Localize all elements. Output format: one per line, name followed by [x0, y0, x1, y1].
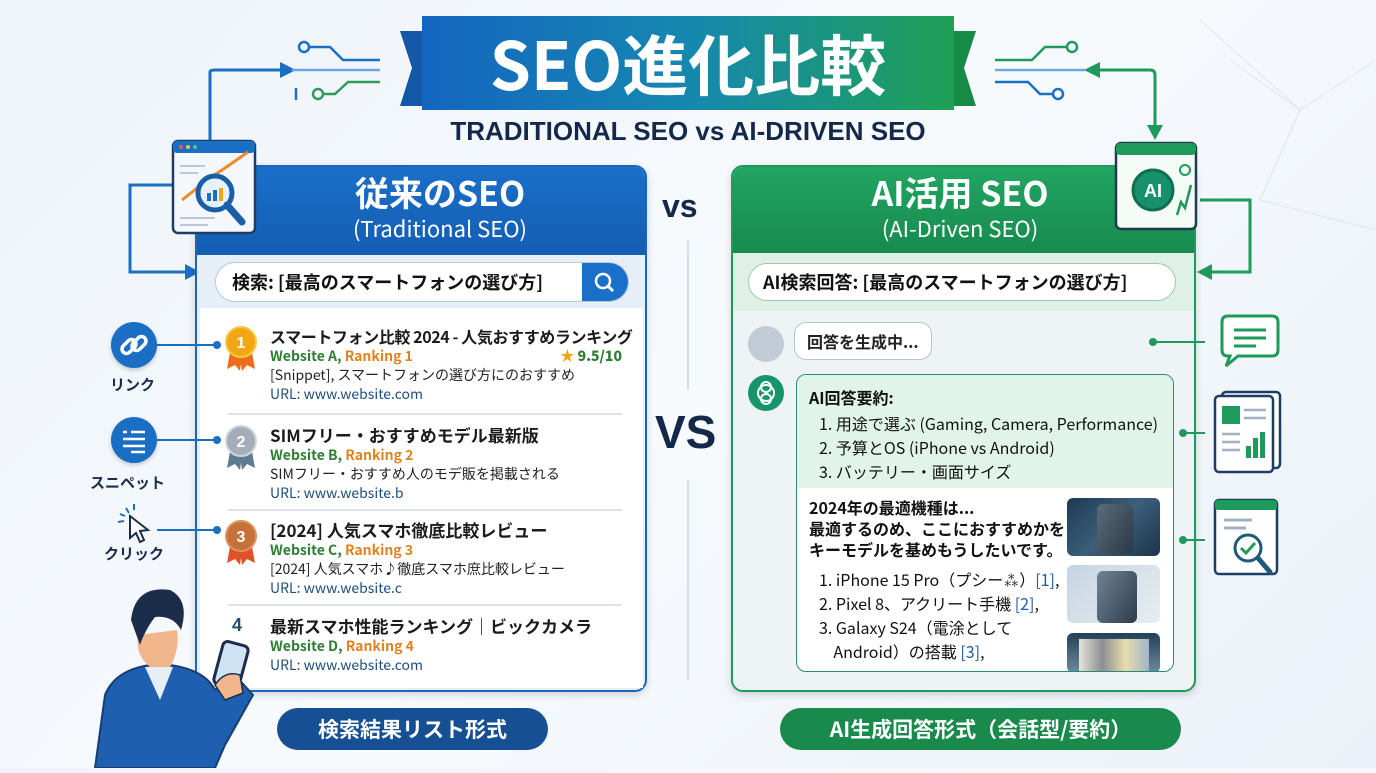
AI answer box: Android）の搭載 [3], [833, 639, 985, 663]
result 1: スマートフォン比較 2024 - 人気おすすめランキング [270, 324, 632, 348]
icon: chat bubble [1220, 314, 1280, 368]
AI answer box: 3. Galaxy S24（電涂として [819, 615, 1012, 639]
AI answer box: AI回答要約: [809, 385, 894, 409]
AI answer box: 1. 用途で選ぶ (Gaming, Camera, Performance) [819, 411, 1158, 435]
icon: document check [1214, 498, 1278, 576]
search bar right [733, 253, 1194, 311]
label: リンク: リンク [110, 374, 155, 395]
result 2: 2 [237, 434, 246, 451]
result 4: 4 [232, 615, 242, 635]
icon: browser magnifier [172, 140, 256, 234]
result 4: Website D, Ranking 4 [270, 636, 414, 656]
icon: document chart [1214, 390, 1282, 474]
label: スニペット: スニペット [90, 472, 165, 493]
chat: generating: 回答を生成中... [807, 329, 919, 353]
result 3: Website C, Ranking 3 [270, 540, 413, 560]
heading: AI活用 SEO [871, 167, 1049, 244]
result 2: SIMフリー・おすすめモデル最新版 [270, 422, 539, 447]
result 1: URL: www.website.com [270, 384, 423, 404]
result 3: [2024] 人気スマホ♪徹底スマホ庶比較レビュー [270, 559, 565, 579]
label pill: AI生成回答形式: AI生成回答形式（会話型/要約） [830, 714, 1131, 744]
result 3 [225, 517, 565, 598]
AI answer box: 2. Pixel 8、アクリート手機 [2], [819, 591, 1039, 615]
label pill: 検索結果リスト形式: 検索結果リスト形式 [318, 714, 507, 744]
phone images [1067, 498, 1160, 556]
heading: AI活用 SEO: AI活用 SEO [871, 167, 1049, 216]
result 1: ★ 9.5/10 [560, 346, 622, 366]
result 4 [232, 613, 592, 675]
result 1: Website A, Ranking 1 [270, 346, 413, 366]
result 2 [225, 422, 560, 503]
result 4: URL: www.website.com [270, 655, 423, 675]
result 2: Website B, Ranking 2 [270, 445, 413, 465]
result 1 [225, 324, 632, 404]
icon: AI browser: AI [1144, 181, 1162, 201]
AI answer box: 最適するのめ、ここにおすすめかを [809, 516, 1065, 540]
icon: click cursor [118, 504, 150, 544]
search bar left [215, 262, 629, 302]
icon: person with phone [94, 589, 254, 768]
heading: 従来のSEO: (Traditional SEO) [353, 212, 527, 244]
AI answer box: 3. バッテリー・画面サイズ [819, 459, 1011, 483]
label pill: AI生成回答形式 [780, 708, 1181, 750]
AI answer box: キーモデルを基めもうしたいです。 [809, 537, 1062, 561]
result 3: 3 [237, 529, 246, 546]
search bar left: 検索: [最高のスマートフォンの選び方] [232, 269, 543, 295]
result 2: URL: www.website.b [270, 483, 404, 503]
result 1: 1 [237, 335, 246, 352]
AI answer box: 2. 予算とOS (iPhone vs Android) [819, 435, 1055, 459]
heading: 従来のSEO: 従来のSEO [355, 167, 525, 216]
icon: AI logo [748, 375, 784, 411]
icon: AI browser [1114, 142, 1198, 230]
vs small: vs [662, 188, 698, 224]
result 3: URL: www.website.c [270, 578, 402, 598]
label: クリック: クリック [104, 543, 164, 564]
icon: snippet [111, 417, 157, 463]
subtitle: TRADITIONAL SEO vs AI-DRIVEN SEO [450, 116, 926, 146]
chat: generating [748, 322, 932, 362]
panel: traditional SEO [195, 165, 647, 692]
AI answer box: 2024年の最適機種は... [809, 495, 974, 519]
AI answer box: 1. iPhone 15 Pro（プシー⁂）[1], [819, 567, 1059, 591]
heading: AI活用 SEO: (AI-Driven SEO) [882, 212, 1038, 244]
heading: 従来のSEO [353, 167, 527, 244]
VS big: VS [655, 406, 716, 458]
text: AI検索回答: [最高のスマートフォンの選び方] [763, 269, 1127, 295]
panel: AI-driven SEO [731, 165, 1196, 692]
results list [200, 308, 643, 688]
icon: link [111, 322, 157, 368]
title banner: SEO進化比較 [490, 14, 886, 110]
result 1: [Snippet], スマートフォンの選び方にのおすすめ [270, 365, 575, 385]
label pill: 検索結果リスト形式 [277, 708, 548, 750]
AI answer box [796, 374, 1174, 672]
result 2: SIMフリー・おすすめ人のモデ販を掲載される [270, 464, 560, 484]
result 3: [2024] 人気スマホ徹底比較レビュー [270, 517, 547, 542]
result 4: 最新スマホ性能ランキング｜ビックカメラ [270, 613, 592, 638]
title banner [400, 14, 976, 110]
